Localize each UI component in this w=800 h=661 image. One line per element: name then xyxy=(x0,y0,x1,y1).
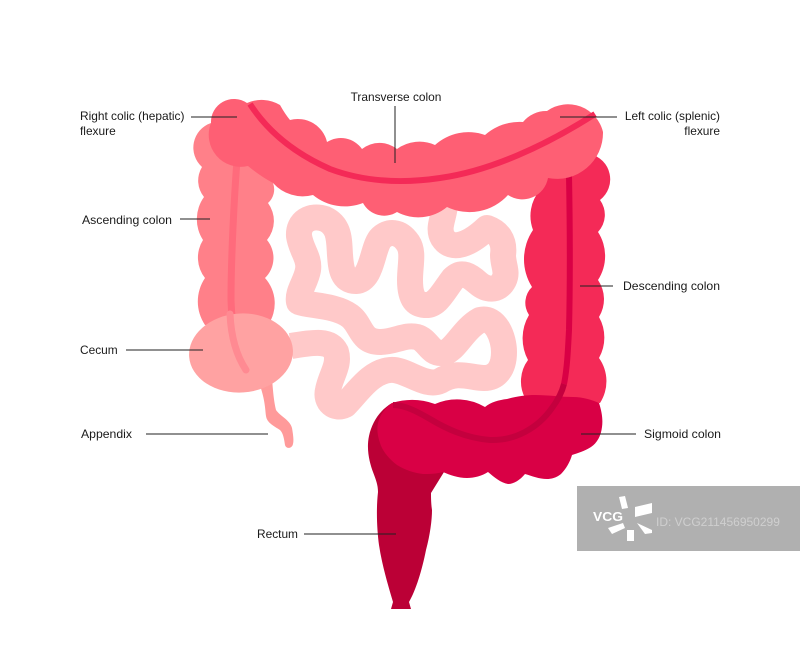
sigmoid colon inner line xyxy=(393,384,564,440)
label: transverse colon: Transverse colon xyxy=(351,90,441,104)
label: left colic flexure: flexure xyxy=(684,124,720,138)
label: sigmoid colon: Sigmoid colon xyxy=(644,427,721,441)
label: rectum xyxy=(257,527,396,541)
ascending colon xyxy=(193,123,275,370)
label: descending colon: Descending colon xyxy=(623,279,720,293)
small intestine xyxy=(291,205,506,407)
label: right colic flexure: Right colic (hepatic) xyxy=(80,109,184,123)
sigmoid colon xyxy=(377,384,602,484)
label: left colic flexure xyxy=(560,109,720,138)
label: descending colon xyxy=(580,279,720,293)
cecum xyxy=(186,310,296,448)
watermark logo xyxy=(593,496,652,541)
label: left colic flexure: Left colic (splenic) xyxy=(625,109,720,123)
label: ascending colon: Ascending colon xyxy=(82,213,172,227)
appendix xyxy=(258,378,293,448)
descending colon xyxy=(521,154,610,403)
label: appendix: Appendix xyxy=(81,427,132,441)
label: right colic flexure: flexure xyxy=(80,124,116,138)
label: cecum xyxy=(80,343,203,357)
label: rectum: Rectum xyxy=(257,527,298,541)
rectum xyxy=(368,403,444,609)
label: transverse colon xyxy=(351,90,441,163)
label: cecum: Cecum xyxy=(80,343,118,357)
ascending colon inner line xyxy=(231,160,246,370)
descending colon inner line xyxy=(564,175,570,384)
watermark logo: VCG xyxy=(593,509,623,524)
label: ascending colon xyxy=(82,213,210,227)
transverse colon xyxy=(209,99,603,217)
label: sigmoid colon xyxy=(581,427,721,441)
watermark xyxy=(577,486,800,551)
transverse colon inner line xyxy=(250,104,595,181)
cecum inner line xyxy=(230,314,246,370)
label: right colic flexure xyxy=(80,109,237,138)
watermark id: ID: VCG211456950299 xyxy=(656,515,780,529)
